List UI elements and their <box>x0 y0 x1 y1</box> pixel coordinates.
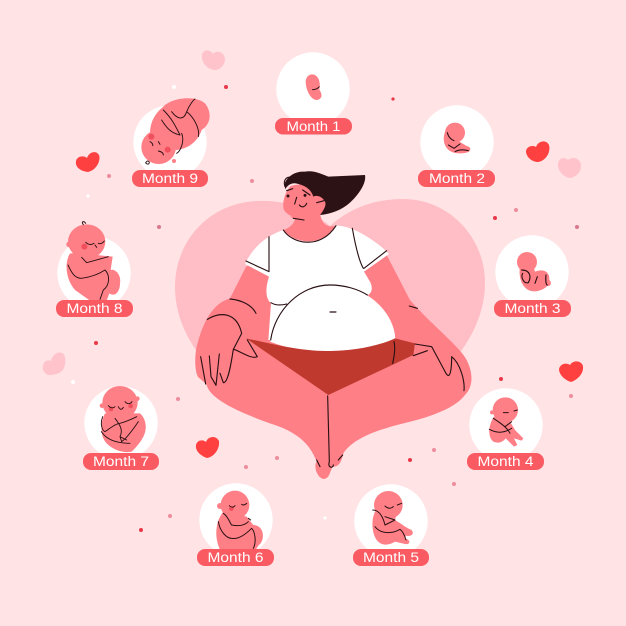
month 4: Month 4 <box>478 454 534 469</box>
hair <box>285 171 365 215</box>
line work <box>201 177 464 467</box>
shirt <box>245 225 389 340</box>
fetus month 3 <box>517 252 551 291</box>
fetus month 5 <box>372 491 413 545</box>
big background heart <box>175 199 485 445</box>
shorts <box>246 338 415 395</box>
hearts <box>43 50 583 458</box>
month 8: Month 8 <box>66 301 122 316</box>
month 9 <box>132 98 210 187</box>
month 5: Month 5 <box>363 550 419 565</box>
fetus month 7 <box>100 386 146 452</box>
month 7: Month 7 <box>93 454 149 469</box>
month 6 <box>197 483 274 566</box>
baby month 9 <box>141 98 210 164</box>
month 1: Month 1 <box>286 119 340 134</box>
month 8 <box>56 222 133 317</box>
fetus month 6 <box>216 491 263 551</box>
decorative dots <box>71 85 579 532</box>
month 3 <box>494 235 571 317</box>
month 4 <box>467 388 544 470</box>
neck <box>283 213 337 244</box>
fetus month 4 <box>489 397 523 447</box>
month 9: Month 9 <box>142 171 198 186</box>
woman figure <box>195 171 471 479</box>
month 5 <box>353 484 429 566</box>
month 1 <box>275 52 352 134</box>
month 2: Month 2 <box>429 171 485 186</box>
belly <box>270 285 395 352</box>
embryo month 1 <box>306 74 322 100</box>
month 7 <box>83 386 159 470</box>
body silhouette <box>195 240 471 479</box>
month 6: Month 6 <box>208 550 264 565</box>
month 3: Month 3 <box>504 301 560 316</box>
embryo month 2 <box>444 123 470 153</box>
month 2 <box>418 105 495 187</box>
face <box>283 185 327 218</box>
baby month 8 <box>66 222 120 301</box>
